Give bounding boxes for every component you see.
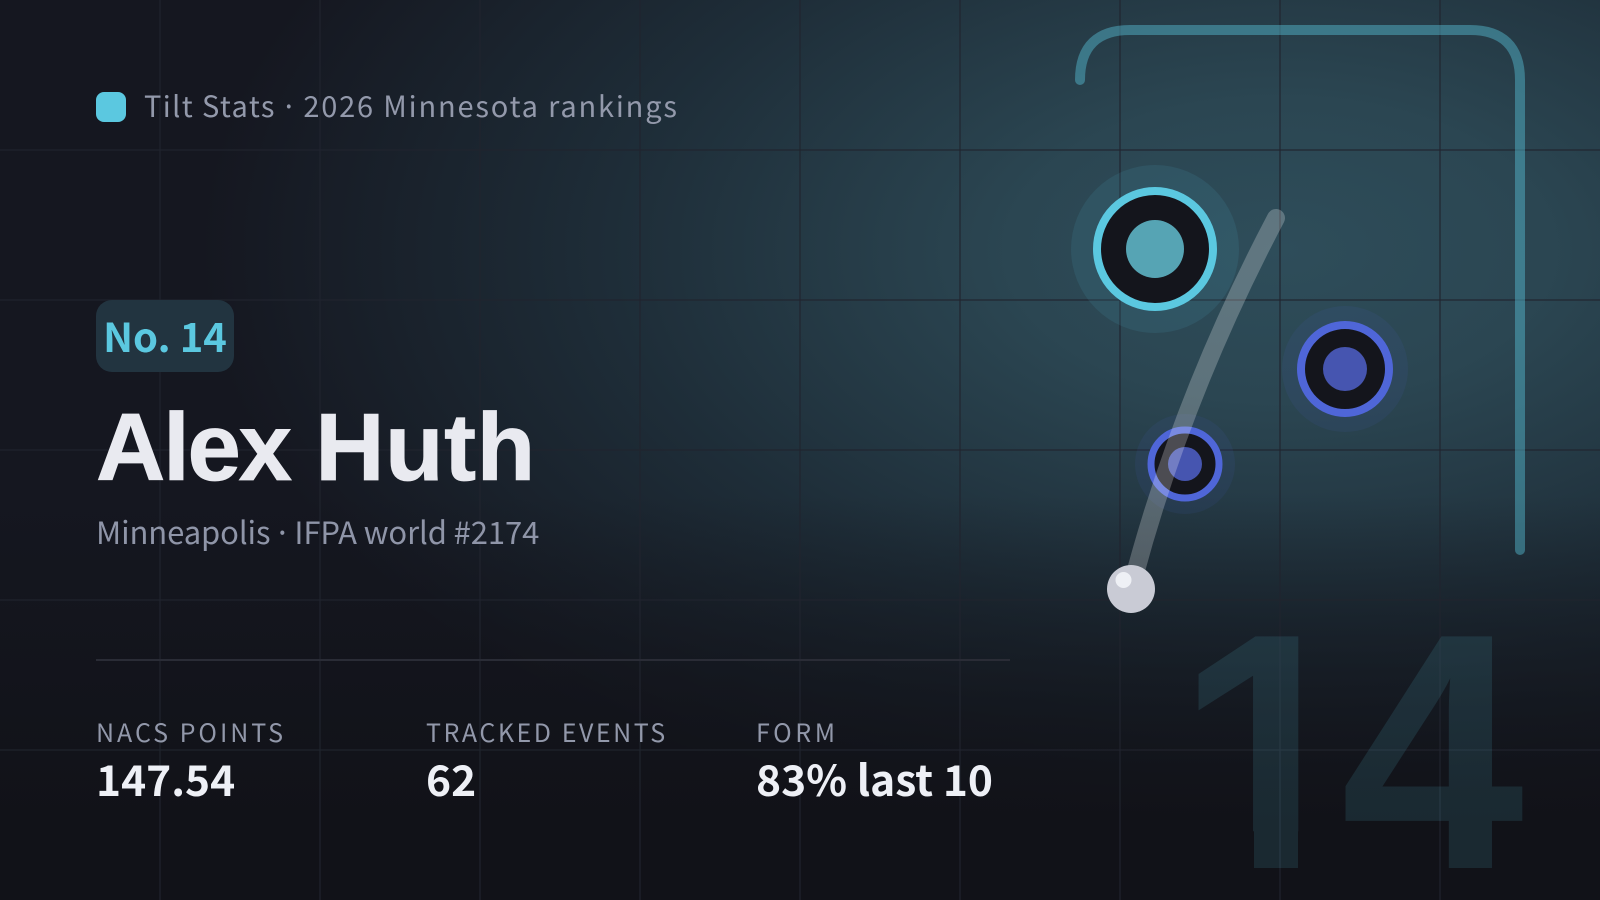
header brand row [96,84,679,126]
medium blue bumper [1282,306,1408,432]
stat: tracked events [426,714,668,809]
rank badge: No. 14 [103,306,227,364]
brand text: Tilt Stats · 2026 Minnesota rankings [144,84,679,126]
pinball [1107,565,1155,613]
stat: form: FORM [756,714,839,750]
stat: form [756,714,993,809]
small blue bumper [1135,414,1235,514]
player name: Alex Huth [96,394,536,501]
stat: NACS points [96,714,286,809]
large cyan bumper [1071,165,1239,333]
location line: Minneapolis · IFPA world #2174 [96,508,539,553]
playfield rail [1080,30,1520,550]
stat: form: 83% last 10 [756,748,993,809]
stat: tracked events: TRACKED EVENTS [426,714,668,750]
stat: NACS points: 147.54 [96,748,235,809]
divider [96,659,1010,661]
ball trajectory [1131,218,1276,589]
logo square [96,92,126,122]
stat: tracked events: 62 [426,748,476,809]
stat: NACS points: NACS POINTS [96,714,286,750]
